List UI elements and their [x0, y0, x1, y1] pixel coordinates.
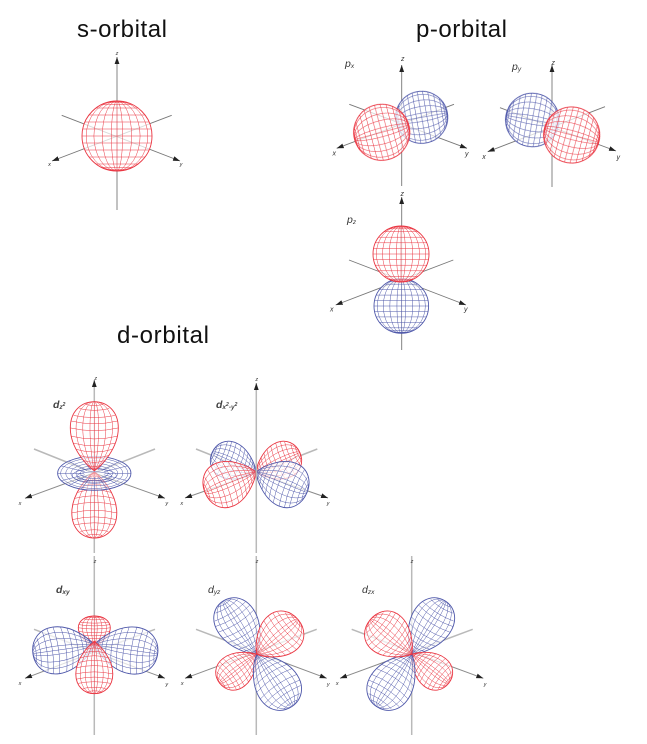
title: p-orbital: p-orbital	[416, 16, 507, 43]
axis labels: z	[115, 51, 119, 57]
axes	[25, 380, 165, 553]
axes	[116, 57, 118, 210]
axis labels: x	[481, 154, 486, 161]
axis labels: x	[18, 501, 22, 507]
lobe: red front	[196, 451, 265, 514]
lobe: blue right	[91, 622, 161, 677]
label: py: p	[512, 61, 518, 73]
lobe: red	[537, 101, 606, 169]
diagram: d-z2 orbital	[18, 376, 169, 553]
lobe: red	[373, 226, 429, 282]
diagram: d-zx orbital	[335, 556, 488, 735]
diagram: p-y orbital	[481, 60, 621, 187]
axis labels	[329, 191, 468, 314]
diagram: d-x2-y2 orbital	[179, 377, 331, 553]
label: dx2-y2: -y	[229, 404, 235, 411]
axis labels: z	[400, 56, 405, 63]
label: pz: p	[347, 214, 353, 226]
diagram: p-z orbital	[329, 191, 468, 350]
lobe: red upper left	[356, 603, 426, 671]
axis labels	[180, 559, 331, 688]
diagram: s orbital	[47, 51, 184, 210]
axis labels: x	[329, 306, 334, 314]
lobe: red	[347, 98, 416, 167]
axes	[340, 556, 483, 735]
axis labels: x	[18, 681, 22, 687]
label: dx2-y2: x	[221, 404, 226, 411]
axis labels: x	[47, 162, 51, 168]
label: dyz: d	[208, 584, 214, 596]
diagram: d-xy orbital	[18, 556, 169, 735]
axes	[185, 556, 327, 735]
label: dz2: 2	[62, 402, 66, 408]
axis labels: z	[410, 559, 414, 565]
lobe: blue	[392, 87, 452, 147]
axis labels: y	[326, 501, 331, 507]
axis labels: y	[164, 682, 169, 688]
axis labels: y	[616, 154, 621, 162]
lobe: red lower left	[209, 641, 267, 697]
axis labels: z	[255, 559, 259, 565]
axis labels	[179, 377, 331, 507]
axis labels: y	[483, 682, 488, 688]
lobe: blue lower right	[238, 642, 310, 719]
label: dxy: xy	[61, 589, 70, 596]
axis labels: x	[180, 681, 184, 687]
label: pz: z	[352, 219, 357, 226]
lobe: blue lower left	[358, 642, 430, 719]
axis labels: z	[551, 60, 556, 67]
label: dzx: zx	[367, 589, 375, 596]
lobe: red upper	[70, 402, 118, 471]
axes	[336, 197, 466, 350]
axis labels: y	[164, 501, 169, 507]
axis labels: x	[179, 501, 183, 507]
axis labels: x	[335, 681, 339, 687]
diagram: p-x orbital	[332, 56, 469, 186]
label: py: y	[517, 66, 522, 73]
axis labels: z	[400, 191, 405, 198]
axes	[25, 556, 165, 735]
lobe: red back	[78, 616, 110, 647]
lobe: blue left	[30, 622, 98, 677]
axis labels: y	[463, 306, 468, 314]
axis labels: y	[464, 151, 469, 158]
lobe: blue back	[205, 436, 264, 489]
label: dx2-y2: d	[216, 399, 222, 411]
label: dz2: d	[53, 399, 59, 411]
label: dxy: d	[56, 584, 62, 596]
axis labels: z	[93, 376, 97, 382]
label: dx2-y2: 2	[234, 402, 238, 408]
diagram: d-yz orbital	[180, 556, 331, 735]
lobe: red back	[248, 436, 307, 489]
title: s-orbital: s-orbital	[77, 16, 167, 43]
axis labels	[481, 60, 621, 162]
z axis	[255, 383, 257, 553]
axis labels: z	[254, 377, 258, 383]
axis labels	[47, 51, 184, 168]
axis labels	[18, 559, 169, 688]
axes	[185, 449, 328, 498]
axis labels: y	[179, 162, 184, 168]
label: px: p	[345, 58, 351, 70]
lobe: blue	[374, 279, 429, 333]
axis labels	[18, 376, 169, 507]
label: dz2: z	[58, 404, 63, 411]
lobe: red upper right	[243, 603, 312, 671]
lobe: red lower	[72, 472, 117, 538]
label: dyz: yz	[213, 589, 221, 596]
axis labels: z	[93, 559, 97, 565]
lobe: blue front	[247, 451, 316, 514]
label: dx2-y2: 2	[225, 402, 229, 408]
axis labels: y	[326, 682, 331, 688]
label: dzx: d	[362, 584, 368, 596]
axis labels	[335, 559, 488, 688]
lobe: blue upper	[206, 590, 275, 665]
label: px: x	[350, 63, 355, 70]
torus: blue ring	[58, 456, 131, 490]
lobe: red lower right	[401, 641, 460, 697]
axis labels: x	[332, 150, 337, 158]
lobe: blue upper	[394, 590, 463, 665]
title: d-orbital: d-orbital	[117, 322, 209, 349]
lobe: blue	[501, 89, 563, 151]
axis labels	[332, 56, 469, 158]
axes	[488, 65, 616, 187]
axes	[337, 65, 467, 186]
sphere: red lobe	[82, 101, 152, 171]
lobe: red front	[76, 642, 113, 694]
